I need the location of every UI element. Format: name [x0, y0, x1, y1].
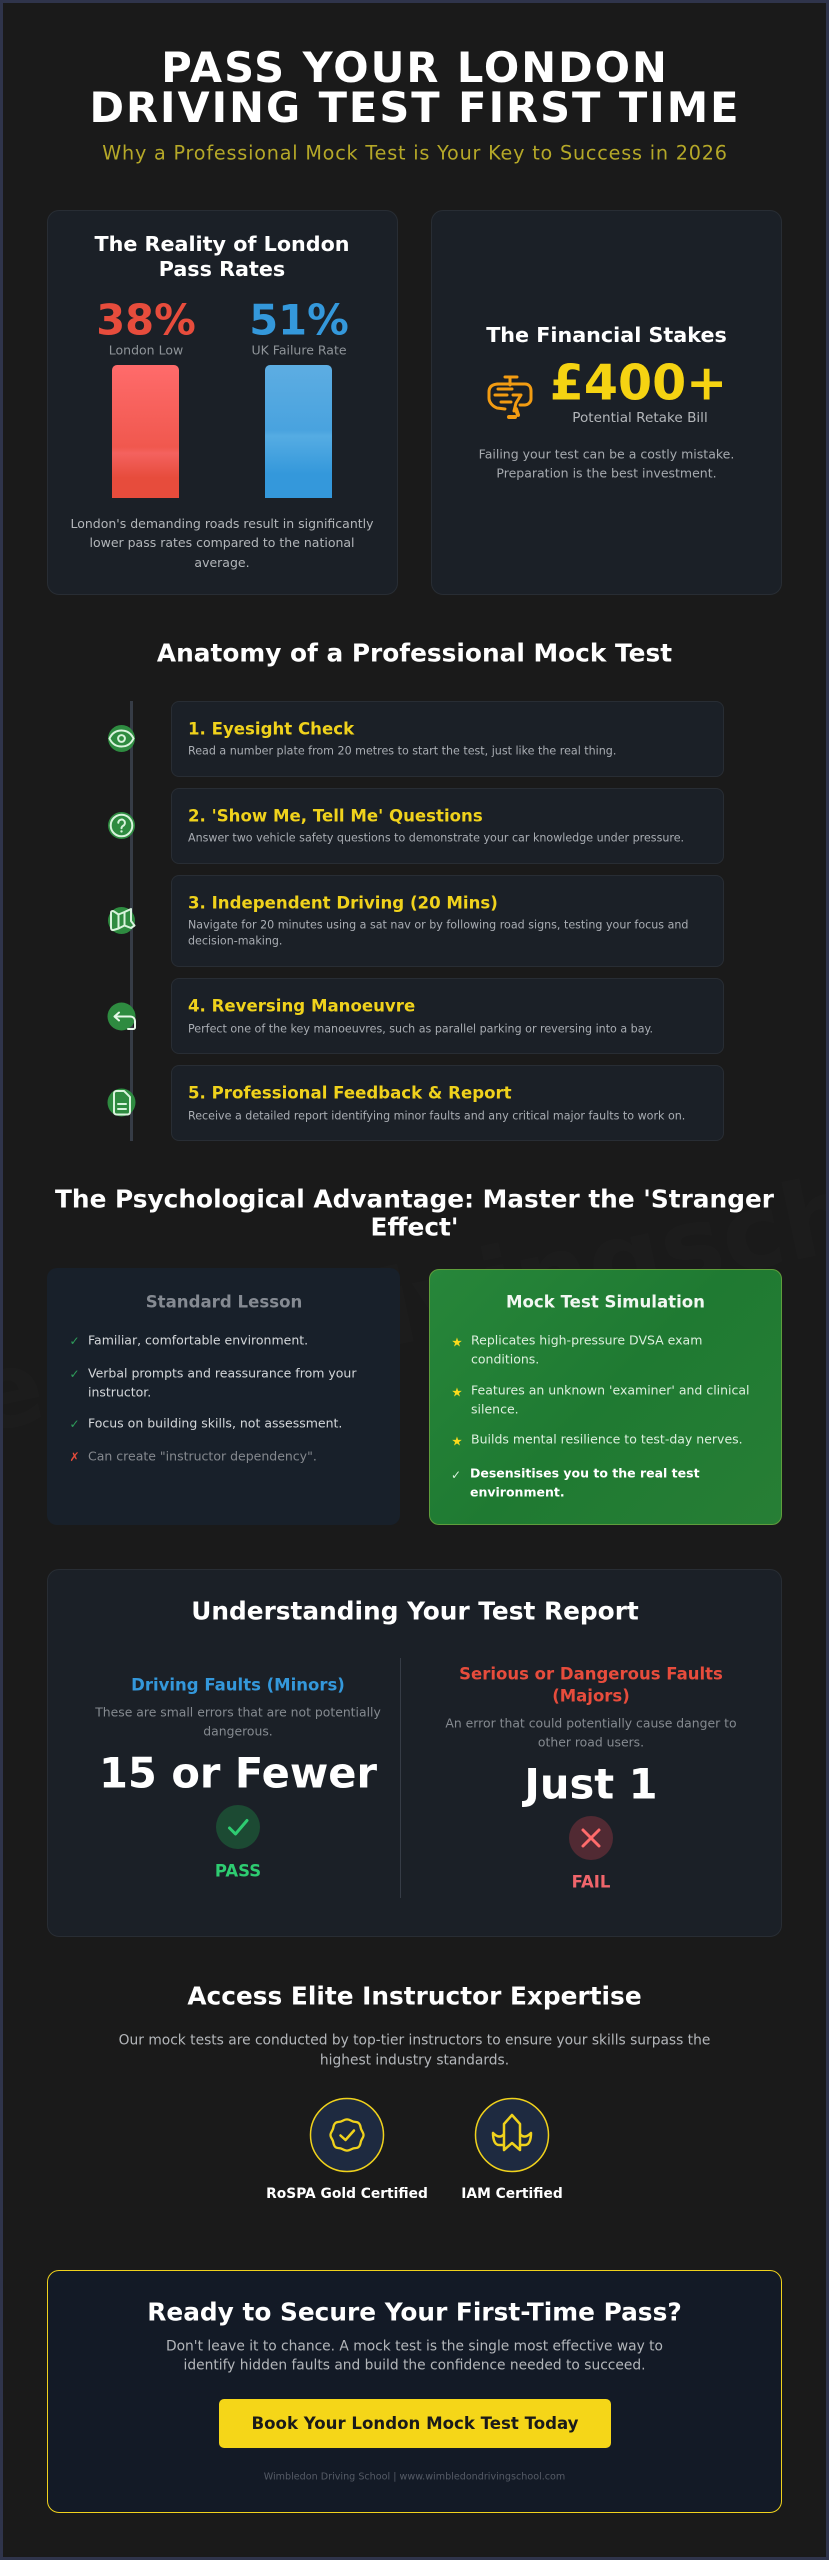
stat: just 1: Just 1 [524, 1760, 658, 1808]
step 3 text: decision-making. [188, 934, 282, 948]
step 4 title: 4. Reversing Manoeuvre [188, 996, 415, 1016]
text: call to action [166, 2338, 663, 2374]
label: fail: FAIL [572, 1872, 610, 1892]
heading: elite expertise: Access Elite Instructor Expertise [187, 1982, 642, 2010]
text: pass rates note: London's demanding roads result in significantly [70, 516, 374, 531]
heading: test report: Understanding Your Test Report [191, 1596, 639, 1626]
stat: 15 or fewer: 15 or Fewer [99, 1748, 377, 1798]
panel: step 5 card [171, 1065, 724, 1141]
cross: ✗ [69, 1450, 80, 1464]
heading: majors: (Majors) [552, 1686, 630, 1706]
step 4 [171, 978, 724, 1054]
label: IAM: IAM Certified [461, 2186, 563, 2202]
list item: focus: Focus on building skills, not assessment. [88, 1416, 342, 1430]
heading: psychological advantage [55, 1184, 774, 1241]
stat: 400 pounds: £400+ [550, 354, 727, 412]
step 3 text [188, 918, 688, 948]
label: retake bill: Potential Retake Bill [572, 410, 708, 426]
button: Book Your London Mock Test Today [252, 2414, 578, 2432]
icon: document [108, 1088, 136, 1116]
title: PASS YOUR LONDON [161, 42, 669, 92]
list item: desensitises [470, 1465, 700, 1500]
text: majors [445, 1715, 737, 1750]
text: call to action: identify hidden faults and build the confidence needed to succeed. [184, 2358, 645, 2374]
text: pass rates note [70, 516, 374, 570]
text: pass rates note: lower pass rates compared to the national [89, 535, 355, 550]
panel: standard lesson [47, 1268, 400, 1525]
list item: replicates: conditions. [471, 1352, 539, 1366]
heading: psychological advantage: The Psychological Advantage: Master the 'Stranger [55, 1184, 774, 1214]
star: ★ [451, 1384, 463, 1400]
label: UK Failure Rate: UK Failure Rate [251, 342, 347, 358]
list item: dependency: Can create "instructor dependency". [88, 1448, 317, 1464]
step 5 [171, 1065, 724, 1141]
icon: map [108, 907, 136, 934]
panel: mock test simulation [429, 1269, 782, 1525]
list item: desensitises: environment. [470, 1484, 565, 1500]
text: pass rates note: average. [194, 555, 250, 570]
text: expertise: Our mock tests are conducted by top-tier instructors to ensure your skills surpass the [119, 2032, 710, 2048]
text: minors [95, 1704, 381, 1738]
label: London Low: London Low [109, 342, 183, 358]
list item: resilience: Builds mental resilience to test-day nerves. [471, 1432, 743, 1446]
heading: majors [459, 1664, 723, 1706]
heading: pass rates: Pass Rates [159, 257, 285, 281]
list item: verbal prompts [88, 1366, 356, 1400]
panel: step 2 card [171, 788, 724, 864]
list item: examiner [471, 1382, 750, 1416]
text: financial note: Preparation is the best investment. [496, 466, 717, 480]
footer: Wimbledon Driving School | www.wimbledondrivingschool.com [264, 2472, 565, 2482]
step 1 text: Read a number plate from 20 metres to start the test, just like the real thing. [188, 744, 616, 758]
heading: minors: Driving Faults (Minors) [131, 1676, 345, 1694]
text: call to action: Don't leave it to chance. A mock test is the single most effective way to [166, 2338, 663, 2354]
panel: test report [47, 1569, 782, 1937]
text: minors: These are small errors that are not potentially [95, 1704, 381, 1719]
text: financial note: Failing your test can be a costly mistake. [479, 446, 734, 461]
label: pass: PASS [215, 1862, 261, 1880]
list item: examiner: silence. [471, 1402, 519, 1416]
step 1 [171, 701, 724, 777]
list item: examiner: Features an unknown 'examiner' and clinical [471, 1382, 750, 1397]
label: RoSPA: RoSPA Gold Certified [266, 2186, 428, 2202]
timeline line [130, 701, 133, 1141]
panel: financial stakes [431, 210, 782, 595]
star: ★ [451, 1434, 463, 1448]
heading: call to action: Ready to Secure Your First-Time Pass? [147, 2298, 682, 2326]
heading: mock test simulation: Mock Test Simulation [506, 1292, 705, 1312]
step 3 [171, 875, 724, 967]
step 4 text: Perfect one of the key manoeuvres, such as parallel parking or reversing into a bay. [188, 1022, 653, 1035]
list item: desensitises: Desensitises you to the real test [470, 1465, 700, 1480]
panel: step 3 card [171, 875, 724, 967]
icon: pass tick [216, 1805, 260, 1849]
panel: call to action [47, 2270, 782, 2513]
subtitle: Why a Professional Mock Test is Your Key to Success in 2026 [102, 142, 728, 164]
step 3 text: Navigate for 20 minutes using a sat nav or by following road signs, testing your focus and [188, 918, 688, 931]
list item: verbal prompts: instructor. [88, 1385, 151, 1400]
text: expertise [119, 2032, 710, 2068]
list item: replicates [471, 1332, 702, 1366]
heading: pass rates [94, 232, 350, 281]
icon: reverse arrow [108, 1002, 136, 1030]
icon: money [488, 376, 532, 419]
step 3 title: 3. Independent Driving (20 Mins) [188, 893, 498, 912]
heading: financial stakes: The Financial Stakes [486, 323, 727, 347]
icon: question [108, 812, 135, 839]
heading: pass rates: The Reality of London [94, 232, 350, 256]
button [219, 2398, 611, 2448]
heading: anatomy: Anatomy of a Professional Mock Test [157, 638, 672, 668]
icon: eye [108, 725, 135, 752]
step 1 title: 1. Eyesight Check [188, 719, 354, 738]
text: minors: dangerous. [203, 1724, 273, 1738]
stat: 51 percent: 51% [249, 296, 349, 344]
step 2 text: Answer two vehicle safety questions to demonstrate your car knowledge under pressure. [188, 832, 684, 844]
panel: step 1 card [171, 701, 724, 777]
text: financial note [479, 446, 734, 480]
text: expertise: highest industry standards. [320, 2052, 509, 2068]
list item: verbal prompts: Verbal prompts and reassurance from your [88, 1366, 356, 1381]
tick: ✓ [69, 1367, 80, 1381]
step 5 title: 5. Professional Feedback & Report [188, 1084, 512, 1102]
step 2 title: 2. 'Show Me, Tell Me' Questions [188, 806, 483, 825]
list item: familiar: Familiar, comfortable environment. [88, 1332, 308, 1348]
title: DRIVING TEST FIRST TIME [89, 83, 741, 132]
step 2 [171, 788, 724, 864]
bar: UK [265, 365, 332, 498]
badge: RoSPA [310, 2098, 384, 2172]
panel: pass rates [47, 210, 398, 595]
heading: standard lesson: Standard Lesson [146, 1292, 302, 1312]
bar: London [112, 365, 179, 498]
icon: fail cross [569, 1816, 613, 1860]
tick: ✓ [69, 1334, 80, 1348]
tick: ✓ [69, 1417, 80, 1431]
badge: IAM [474, 2098, 550, 2172]
title [89, 42, 741, 132]
list item: replicates: Replicates high-pressure DVSA exam [471, 1332, 702, 1347]
heading: majors: Serious or Dangerous Faults [459, 1664, 723, 1683]
divider [400, 1658, 401, 1898]
text: majors: An error that could potentially cause danger to [445, 1715, 737, 1730]
panel: step 4 card [171, 978, 724, 1054]
step 5 text: Receive a detailed report identifying minor faults and any critical major faults to work on. [188, 1109, 685, 1122]
text: majors: other road users. [538, 1734, 644, 1750]
heading: psychological advantage: Effect' [370, 1212, 458, 1241]
star: ★ [451, 1334, 463, 1350]
stat: 38 percent: 38% [96, 296, 196, 344]
tick: ✓ [451, 1468, 461, 1482]
